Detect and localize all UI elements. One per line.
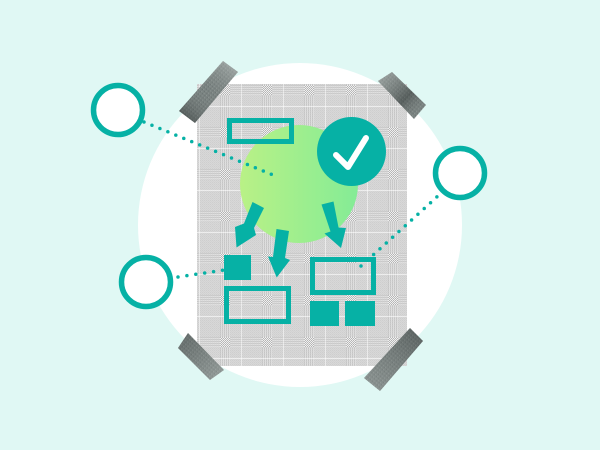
callout circle: left	[122, 258, 170, 306]
white backdrop circle	[138, 63, 462, 387]
callout circle: top left	[94, 86, 142, 134]
textured paper sheet	[197, 84, 407, 366]
outlined box right	[312, 260, 374, 292]
filled square lower right 2	[345, 301, 375, 326]
check badge	[317, 117, 386, 186]
filled square lower right 1	[310, 301, 339, 326]
filled square node	[224, 255, 251, 280]
dotted connector: top left	[144, 122, 273, 175]
arrow: right down	[322, 202, 346, 248]
top outlined box	[230, 120, 292, 142]
dotted connector: right	[361, 195, 439, 266]
dotted connector: left	[178, 270, 224, 277]
icon: check mark	[336, 138, 366, 167]
callout circle: right	[436, 148, 484, 198]
green gradient circle	[240, 125, 358, 243]
tape: bottom right	[364, 328, 423, 391]
arrow: left down	[235, 202, 264, 248]
tape: top left	[179, 61, 238, 123]
arrow: center down	[268, 229, 290, 278]
outlined box lower left	[226, 288, 288, 322]
tape: bottom left	[178, 333, 224, 380]
tape: top right	[378, 72, 426, 119]
